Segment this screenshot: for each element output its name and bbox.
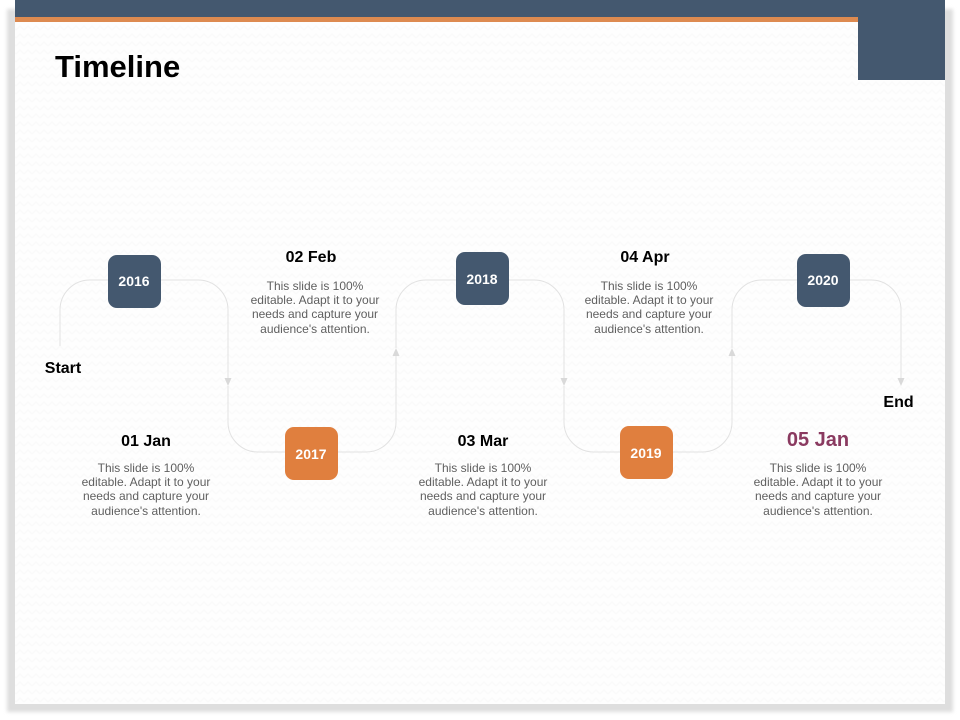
- milestone: 01 Jan: 01 Jan: [121, 433, 171, 450]
- milestone: 05 Jan: audience's attention.: [763, 504, 873, 518]
- milestone: 02 Feb: needs and capture your: [252, 307, 378, 321]
- milestone: 03 Mar: audience's attention.: [428, 504, 538, 518]
- milestone: 05 Jan: This slide is 100%: [770, 461, 867, 475]
- milestone: 02 Feb: editable. Adapt it to your: [251, 293, 379, 307]
- milestone: 04 Apr: This slide is 100%: [601, 279, 698, 293]
- arrow: down to 2019: [560, 378, 568, 386]
- milestone: 04 Apr: editable. Adapt it to your: [585, 293, 713, 307]
- milestone: 05 Jan: needs and capture your: [755, 489, 881, 503]
- start label: Start: [45, 360, 82, 377]
- milestone: 02 Feb: [251, 249, 379, 336]
- milestone: 03 Mar: This slide is 100%: [435, 461, 532, 475]
- timeline connector: [60, 280, 904, 452]
- header bar: [15, 0, 945, 80]
- year box 2020: [797, 254, 850, 307]
- milestone: 02 Feb: audience's attention.: [260, 322, 370, 336]
- milestone: 05 Jan: editable. Adapt it to your: [754, 475, 882, 489]
- milestone: 03 Mar: needs and capture your: [420, 489, 546, 503]
- milestone: 01 Jan: audience's attention.: [91, 504, 201, 518]
- year box 2016: 2016: [118, 273, 150, 289]
- milestone: 04 Apr: [585, 249, 713, 336]
- year box 2018: 2018: [466, 271, 498, 287]
- milestone: 04 Apr: audience's attention.: [594, 322, 704, 336]
- year box 2020: 2020: [807, 272, 839, 288]
- milestone: 02 Feb: 02 Feb: [286, 249, 337, 266]
- year box 2019: [620, 426, 673, 479]
- milestone: 03 Mar: [419, 433, 547, 518]
- milestone: 01 Jan: This slide is 100%: [98, 461, 195, 475]
- year box 2019: 2019: [630, 445, 662, 461]
- arrow: up to 2020: [728, 348, 736, 356]
- title: Timeline: [55, 49, 180, 84]
- year box 2017: 2017: [295, 446, 327, 462]
- milestone: 01 Jan: needs and capture your: [83, 489, 209, 503]
- year box 2016: [108, 255, 161, 308]
- milestone: 02 Feb: This slide is 100%: [267, 279, 364, 293]
- milestone: 03 Mar: 03 Mar: [458, 433, 508, 450]
- milestone: 04 Apr: 04 Apr: [620, 249, 670, 266]
- arrow: down to 2017: [224, 378, 232, 386]
- milestone: 01 Jan: editable. Adapt it to your: [82, 475, 210, 489]
- milestone: 01 Jan: [82, 433, 210, 518]
- milestone: 04 Apr: needs and capture your: [586, 307, 712, 321]
- milestone: 03 Mar: editable. Adapt it to your: [419, 475, 547, 489]
- end label: End: [883, 394, 914, 411]
- year box 2018: [456, 252, 509, 305]
- arrow: down to end: [898, 378, 904, 386]
- arrow: up to 2018: [392, 348, 400, 356]
- milestone: 05 Jan: [754, 429, 882, 518]
- year box 2017: [285, 427, 338, 480]
- milestone: 05 Jan: 05 Jan: [787, 429, 849, 451]
